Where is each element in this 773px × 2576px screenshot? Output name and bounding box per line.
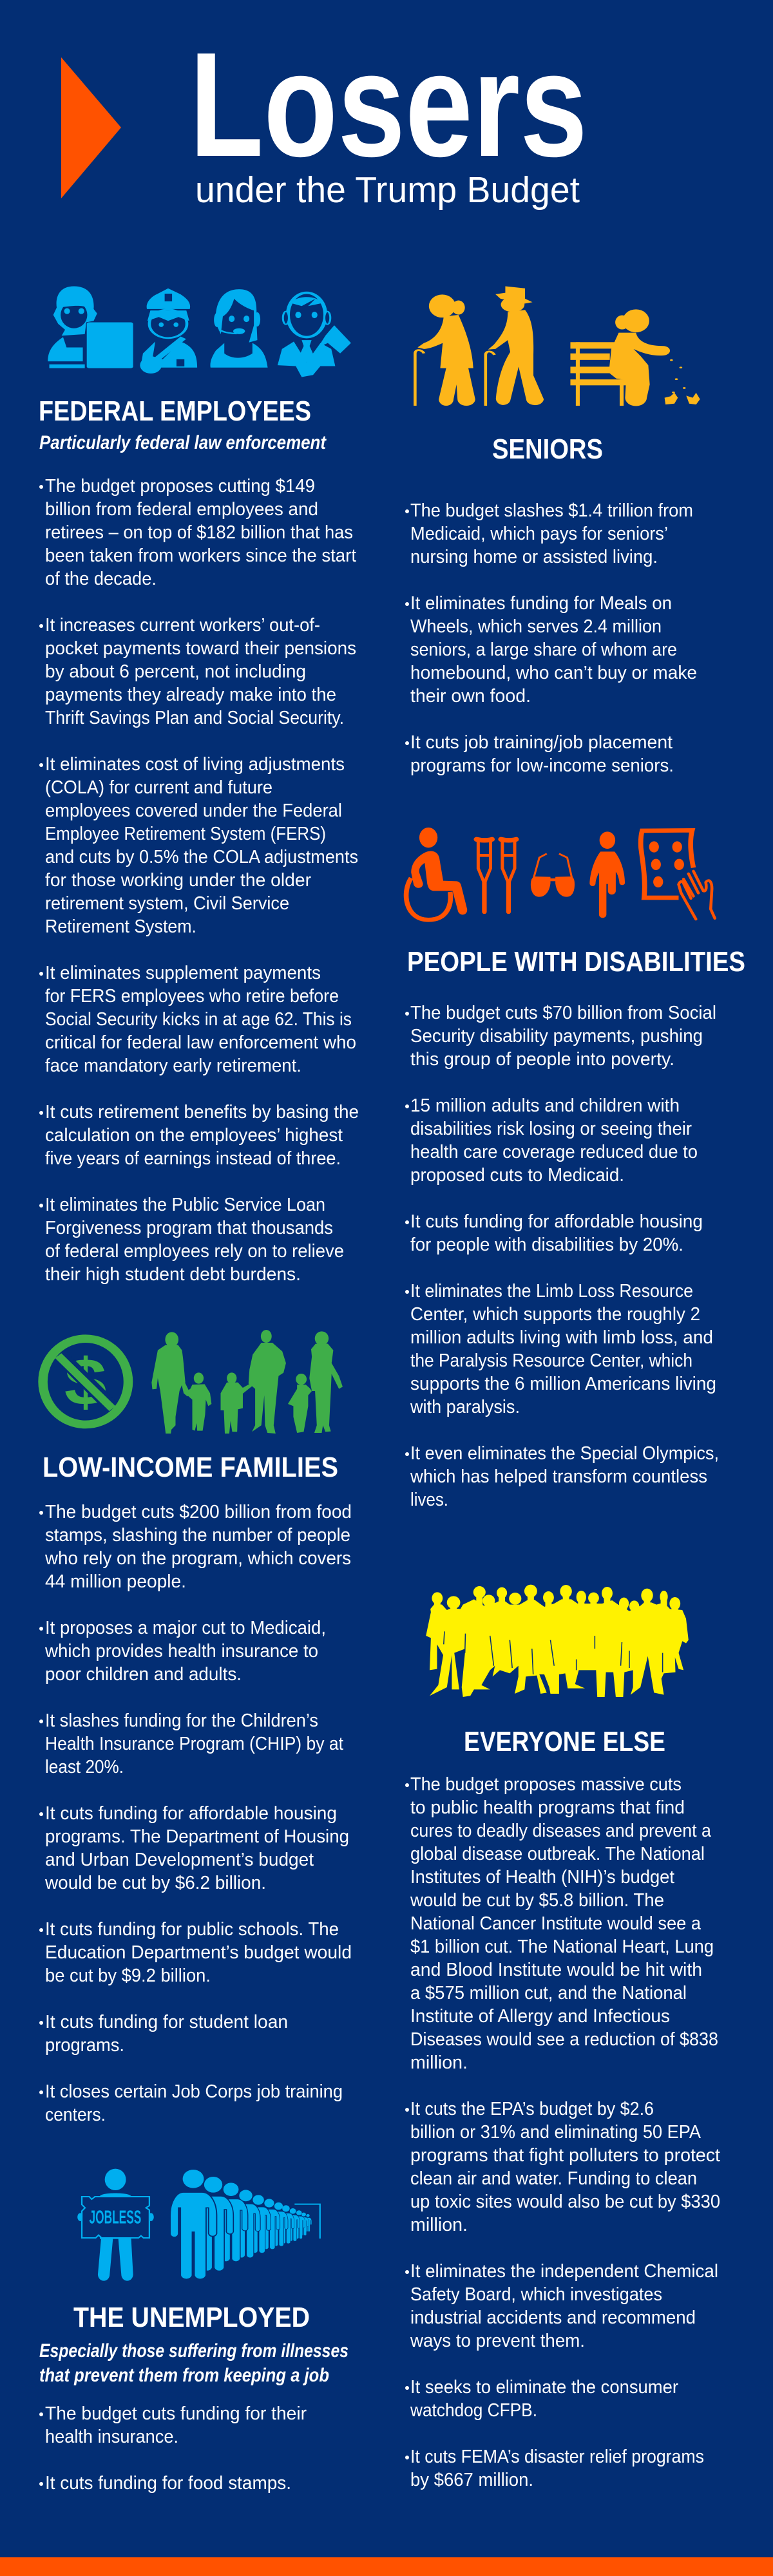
text: everyone else bullets: billion or 31% and eliminating 50 EPA [410,2122,701,2143]
heading: federal employees: FEDERAL EMPLOYEES [39,396,311,427]
text: low-income bullets: Health Insurance Program (CHIP) by at [45,1734,343,1754]
text: unemployed bullets [39,2403,307,2494]
text: seniors bullets: seniors, a large share of whom are [410,639,677,660]
text: seniors bullets [405,500,697,776]
text: everyone else bullets: watchdog CFPB. [410,2400,537,2421]
panel: everyone else [405,1585,720,2490]
text: federal employee bullets: The budget proposes cutting $149 [45,476,315,497]
text: federal employee bullets: It cuts retirement benefits by basing the [45,1102,359,1122]
text: everyone else bullets: cures to deadly diseases and prevent a [410,1821,712,1841]
text: seniors bullets: homebound, who can’t buy or make [410,663,697,683]
footer bar [0,2557,773,2576]
text: federal employee bullets: payments they already make into the [45,685,336,705]
heading: the unemployed: THE UNEMPLOYED [73,2302,310,2333]
text: low-income bullets: programs. [45,2035,124,2056]
text: low-income bullets: It slashes funding for the Children’s [45,1710,318,1731]
icon: disability symbols [406,828,715,920]
text: federal employee bullets: Social Security kicks in at age 62. This is [45,1009,352,1030]
text: low-income bullets: which provides health insurance to [44,1641,318,1662]
text: disabilities bullets: with paralysis. [410,1397,520,1417]
heading: low-income families: LOW-INCOME FAMILIES [43,1452,338,1483]
text: seniors bullets: Medicaid, which pays for seniors’ [410,524,668,544]
text: everyone else bullets: a $575 million cut, and the National [410,1983,687,2003]
panel: the unemployed [39,2169,348,2494]
text: seniors bullets: nursing home or assisted living. [410,547,658,567]
text: disabilities bullets: lives. [410,1490,448,1510]
icon: orange triangle [61,57,121,198]
icon: no money and family silhouettes [43,1330,343,1434]
text: federal employee bullets: It increases current workers’ out-of- [45,615,320,636]
text: federal employee bullets: pocket payments toward their pensions [45,638,356,659]
text: everyone else bullets: National Cancer Institute would see a [410,1913,701,1934]
text: unemployed bullets: The budget cuts funding for their [45,2403,307,2424]
text: federal employee bullets: calculation on the employees’ highest [45,1125,343,1146]
text: federal employee bullets: employees covered under the Federal [45,800,342,821]
text: federal employee bullets: for those working under the older [45,870,311,891]
text: disabilities bullets: health care coverage reduced due to [410,1142,698,1162]
text: low-income bullets: centers. [45,2105,106,2125]
text: everyone else bullets: Institute of Allergy and Infectious [410,2006,670,2027]
text: federal employee bullets: been taken from workers since the start [45,545,356,566]
heading: seniors: SENIORS [492,434,603,465]
panel: low-income families [39,1330,352,2125]
text: federal employee bullets: billion from federal employees and [45,499,318,520]
text: federal employee bullets: of the decade. [45,569,157,589]
text: federal employee bullets: and cuts by 0.5% the COLA adjustments [45,847,358,867]
text: unemployed bullets: health insurance. [45,2427,178,2447]
text: federal employee bullets: critical for federal law enforcement who [45,1032,356,1053]
text: low-income bullets: It closes certain Job Corps job training [45,2081,343,2102]
text: low-income bullets: poor children and adults. [45,1664,242,1685]
text: low-income bullets: It cuts funding for affordable housing [45,1803,337,1824]
text: everyone else bullets: million. [410,2215,468,2235]
text: federal employee bullets: by about 6 percent, not including [45,661,306,682]
text: disabilities bullets: It even eliminates the Special Olympics, [410,1443,719,1464]
text: everyone else bullets: clean air and water. Funding to clean [410,2168,697,2189]
text: federal employee bullets: Retirement System. [45,916,196,937]
text: disabilities bullets: proposed cuts to Medicaid. [410,1165,624,1186]
text: low-income bullets: least 20%. [45,1757,124,1777]
text: federal employee bullets: Thrift Savings Plan and Social Security. [45,708,344,728]
text: federal employee bullets: of federal employees rely on to relieve [45,1241,344,1262]
icon: jobless person and queue: JOBLESS [90,2207,141,2228]
text: low-income bullets: The budget cuts $200 billion from food [45,1502,352,1522]
text: disabilities bullets: It cuts funding for affordable housing [410,1211,703,1232]
text: federal employee bullets [39,476,359,1285]
text: everyone else bullets: up toxic sites would also be cut by $330 [410,2192,720,2212]
panel: people with disabilities [405,828,745,1510]
text: low-income bullets: Education Department’s budget would [45,1942,352,1963]
text: disabilities bullets: which has helped transform countless [410,1466,707,1487]
text: disabilities bullets: It eliminates the Limb Loss Resource [410,1281,693,1302]
text: everyone else bullets: The budget proposes massive cuts [410,1774,682,1795]
text: seniors bullets: It eliminates funding for Meals on [410,593,672,614]
panel: seniors [405,287,700,776]
text: everyone else bullets: ways to prevent them. [410,2331,585,2351]
text: disabilities bullets: supports the 6 million Americans living [410,1374,716,1394]
text: everyone else bullets: It cuts the EPA’s budget by $2.6 [410,2099,654,2119]
text: low-income bullets: It cuts funding for public schools. The [45,1919,339,1940]
text: everyone else bullets: industrial accidents and recommend [410,2307,696,2328]
subtitle: under the Trump Budget [195,169,580,211]
subheading: illnesses: Especially those suffering from illnesses [39,2340,348,2362]
text: federal employee bullets: retirees – on top of $182 billion that has [45,522,353,543]
text: seniors bullets: The budget slashes $1.4 trillion from [410,500,693,521]
text: low-income bullets [39,1502,352,2125]
text: everyone else bullets: Diseases would see a reduction of $838 [410,2029,718,2050]
icon: seniors with canes and bench [415,287,700,406]
text: federal employee bullets: (COLA) for current and future [45,777,272,798]
text: disabilities bullets: Security disability payments, pushing [410,1026,703,1046]
text: disabilities bullets: Center, which supports the roughly 2 [410,1304,700,1325]
text: disabilities bullets: The budget cuts $70 billion from Social [410,1003,716,1023]
text: low-income bullets: It cuts funding for student loan [45,2012,288,2032]
text: everyone else bullets: Institutes of Health (NIH)’s budget [410,1867,674,1888]
text: low-income bullets: It proposes a major cut to Medicaid, [45,1618,326,1638]
text: low-income bullets: be cut by $9.2 billion. [45,1965,211,1986]
icon: no money and family silhouettes: $ [64,1345,107,1419]
text: everyone else bullets: by $667 million. [410,2470,533,2490]
text: everyone else bullets: would be cut by $5.8 billion. The [410,1890,664,1911]
text: disabilities bullets: the Paralysis Resource Center, which [410,1350,692,1371]
panel: federal employees [39,287,359,1285]
text: everyone else bullets: to public health programs that find [410,1797,685,1818]
text: low-income bullets: who rely on the program, which covers [44,1548,351,1569]
text: federal employee bullets: retirement system, Civil Service [45,893,289,914]
text: everyone else bullets: $1 billion cut. The National Heart, Lung [410,1937,714,1957]
text: low-income bullets: and Urban Development’s budget [45,1850,314,1870]
text: everyone else bullets: It cuts FEMA’s disaster relief programs [410,2447,704,2467]
icon: federal workers [48,287,351,377]
text: federal employee bullets: It eliminates supplement payments [45,963,321,983]
text: federal employee bullets: It eliminates the Public Service Loan [45,1195,325,1215]
subheading: federal law enforcement: Particularly federal law enforcement [39,432,327,453]
text: everyone else bullets: million. [410,2052,468,2073]
text: federal employee bullets: five years of earnings instead of three. [45,1148,341,1169]
icon: crowd silhouette [426,1585,689,1697]
text: federal employee bullets: their high student debt burdens. [45,1264,301,1285]
text: seniors bullets: programs for low-income seniors. [410,755,674,776]
header [61,21,587,211]
text: everyone else bullets: It eliminates the independent Chemical [410,2261,718,2282]
text: low-income bullets: 44 million people. [45,1571,186,1592]
text: federal employee bullets: It eliminates cost of living adjustments [45,754,345,775]
text: everyone else bullets: global disease outbreak. The National [410,1844,705,1864]
icon: jobless person and queue [77,2169,320,2281]
text: disabilities bullets: disabilities risk losing or seeing their [410,1119,692,1139]
text: disabilities bullets [405,1003,719,1510]
text: everyone else bullets [405,1774,720,2490]
text: disabilities bullets: 15 million adults and children with [410,1095,680,1116]
text: everyone else bullets: programs that fight polluters to protect [410,2145,720,2166]
text: low-income bullets: stamps, slashing the number of people [45,1525,350,1546]
text: low-income bullets: programs. The Department of Housing [45,1826,349,1847]
text: seniors bullets: Wheels, which serves 2.4 million [410,616,662,637]
text: low-income bullets: would be cut by $6.2 billion. [44,1873,266,1893]
text: federal employee bullets: Employee Retirement System (FERS) [45,824,326,844]
text: seniors bullets: their own food. [410,686,531,706]
text: seniors bullets: It cuts job training/job placement [410,732,673,753]
text: federal employee bullets: face mandatory early retirement. [45,1056,301,1076]
text: everyone else bullets: It seeks to eliminate the consumer [410,2377,678,2398]
text: disabilities bullets: for people with disabilities by 20%. [410,1235,683,1255]
text: everyone else bullets: and Blood Institute would be hit with [410,1960,702,1980]
text: disabilities bullets: this group of people into poverty. [410,1049,674,1070]
text: disabilities bullets: million adults living with limb loss, and [410,1327,713,1348]
text: unemployed bullets: It cuts funding for food stamps. [45,2473,291,2494]
text: everyone else bullets: Safety Board, which investigates [410,2284,662,2305]
subheading: keeping a job: that prevent them from keeping a job [39,2365,329,2386]
heading: everyone else: EVERYONE ELSE [464,1727,665,1757]
text: federal employee bullets: for FERS employees who retire before [45,986,339,1007]
text: federal employee bullets: Forgiveness program that thousands [45,1218,333,1238]
title: Losers [189,21,587,187]
